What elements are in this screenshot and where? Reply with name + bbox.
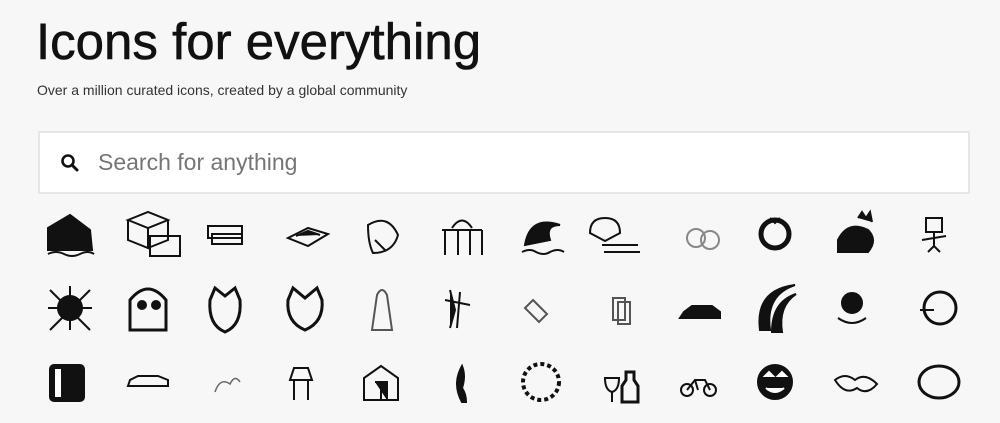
row 1 icons (48, 212, 946, 256)
search bar (38, 131, 970, 194)
icon grid (47, 210, 960, 404)
icon: search (61, 154, 79, 172)
search placeholder: Search for anything (98, 149, 297, 175)
title: Icons for everything (36, 13, 481, 70)
row 2 icons (48, 285, 956, 332)
row 3 icons (50, 364, 959, 402)
subtitle: Over a million curated icons, created by a global community (37, 82, 407, 98)
